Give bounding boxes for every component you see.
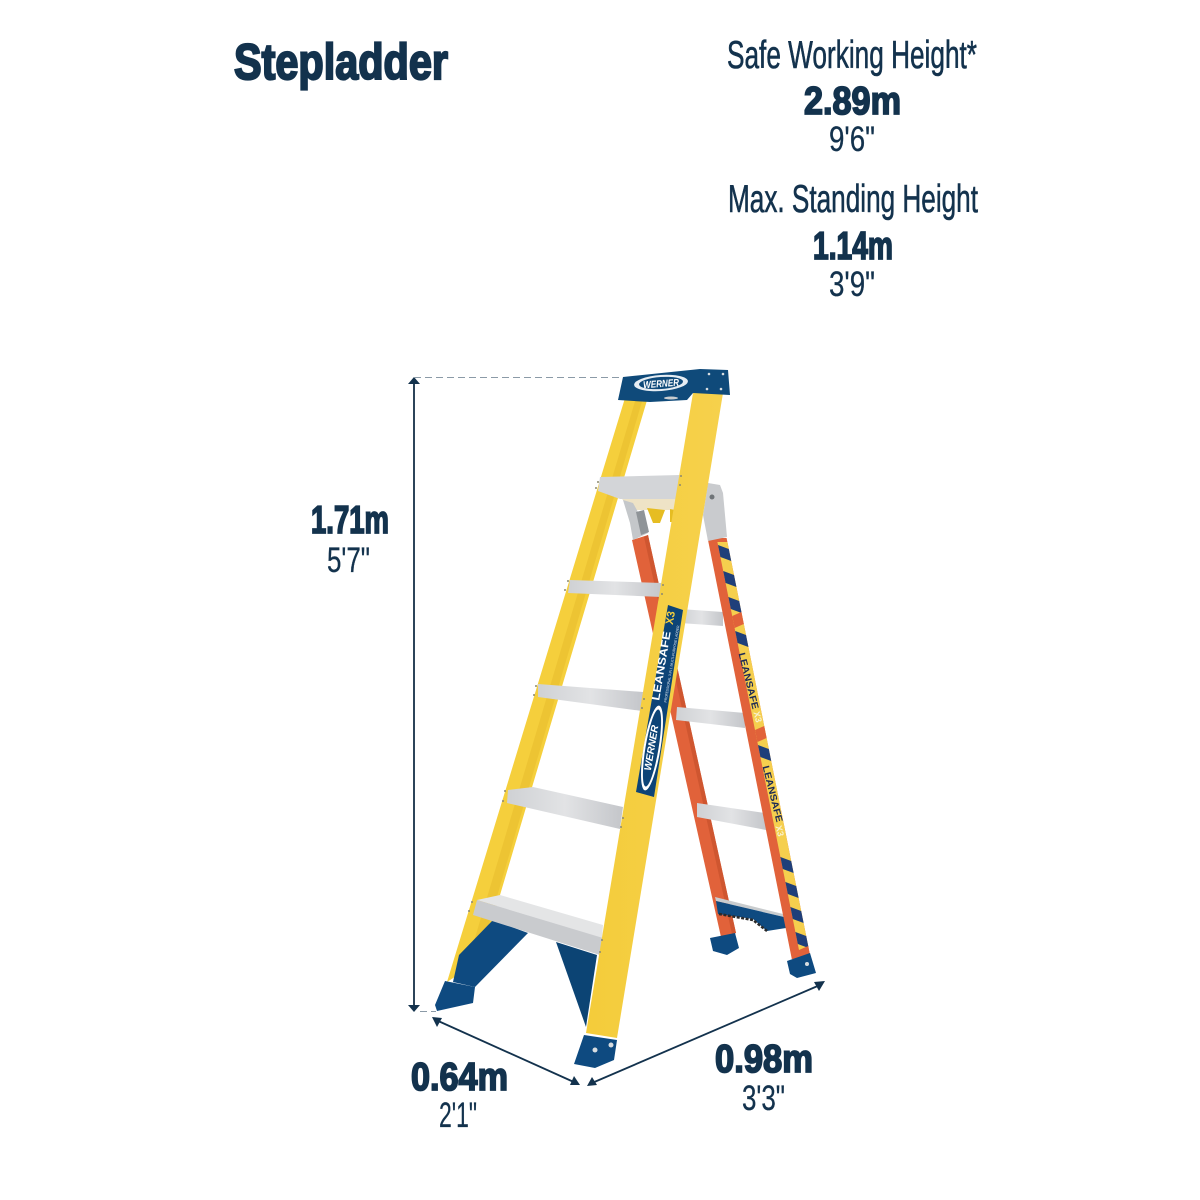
max standing height block: 3'9" bbox=[829, 265, 875, 304]
base length label: 0.98m bbox=[715, 1038, 813, 1081]
title: Stepladder bbox=[234, 34, 448, 90]
safe working height block: 9'6" bbox=[829, 120, 875, 159]
front rail label: PROFESSIONAL 3 IN 1 MULTI-PURPOSE LADDER bbox=[664, 625, 680, 703]
front foot bbox=[574, 1035, 617, 1068]
base length label bbox=[715, 1038, 813, 1118]
rear rail labels bbox=[736, 652, 786, 837]
left foot bbox=[435, 981, 475, 1011]
step rivets bbox=[468, 475, 682, 953]
safe working height block bbox=[727, 34, 977, 159]
rear steps bbox=[676, 609, 766, 830]
height label: 1.71m bbox=[311, 499, 389, 542]
base length label: 3'3" bbox=[742, 1079, 785, 1118]
arrow: depth bbox=[432, 1017, 580, 1085]
ladder illustration bbox=[435, 369, 816, 1068]
max standing height block: Max. Standing Height bbox=[728, 178, 978, 221]
rear brace bbox=[632, 535, 736, 937]
rear rail labels: X3 bbox=[773, 824, 786, 837]
platform underside and latch bbox=[620, 497, 679, 540]
front steps bbox=[473, 475, 680, 955]
max standing height block: 1.14m bbox=[813, 225, 893, 268]
rear feet bbox=[710, 933, 816, 978]
depth label: 0.64m bbox=[411, 1056, 508, 1099]
arrow: vertical height bbox=[408, 377, 626, 1012]
height label: 5'7" bbox=[327, 541, 370, 580]
top cap with logo bbox=[618, 369, 730, 402]
rear rail labels: X3 bbox=[751, 710, 764, 723]
front rail label: WERNER bbox=[643, 724, 661, 772]
blue stabiliser braces bbox=[453, 920, 597, 1027]
left yellow rail bbox=[447, 397, 648, 982]
safe working height block: Safe Working Height* bbox=[727, 34, 977, 77]
rear rail labels: LEANSAFE bbox=[736, 652, 760, 710]
safe working height block: 2.89m bbox=[804, 80, 901, 123]
top cap with logo: WERNER bbox=[643, 378, 680, 391]
rear hinge bracket bbox=[703, 483, 727, 541]
arrow: base length bbox=[587, 981, 825, 1086]
depth label: 2'1" bbox=[439, 1096, 477, 1135]
front yellow rail bbox=[586, 393, 723, 1038]
front rail label: X3 bbox=[664, 610, 678, 626]
depth label bbox=[411, 1056, 508, 1135]
front rail label bbox=[636, 605, 683, 797]
front rail label: LEANSAFE bbox=[650, 630, 674, 701]
rear bottom step bbox=[715, 897, 786, 931]
height label bbox=[311, 499, 389, 580]
rear rail with hazard stripes bbox=[708, 538, 811, 959]
rear rail labels: LEANSAFE bbox=[760, 765, 784, 823]
max standing height block bbox=[728, 178, 978, 304]
